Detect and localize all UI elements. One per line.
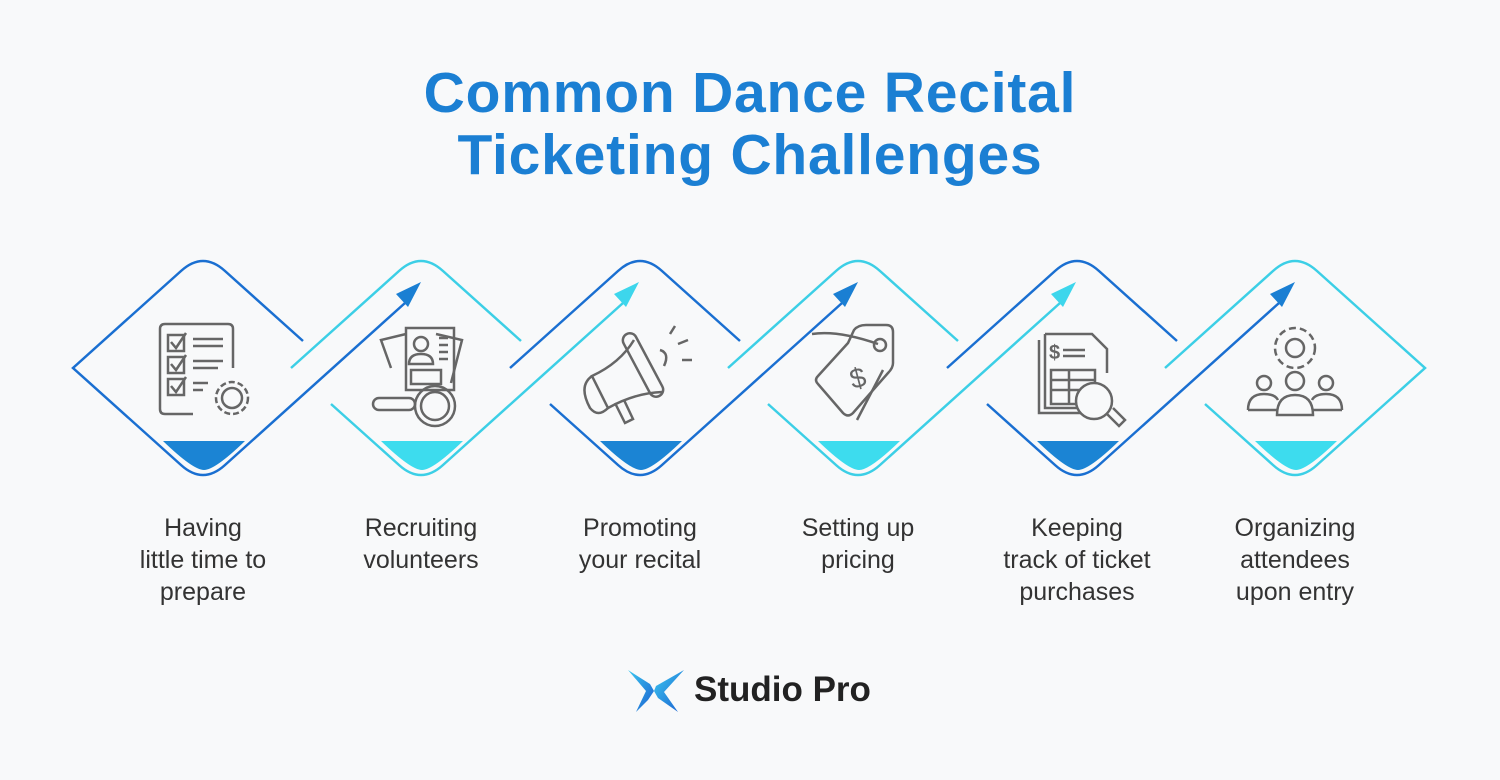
label 1: prepare [160, 578, 246, 606]
icon: price tag: $ [846, 361, 870, 395]
icon: team with gear [1248, 328, 1342, 415]
icon: megaphone [584, 326, 692, 423]
label 6 [1235, 514, 1355, 606]
label 2: volunteers [363, 546, 479, 574]
label 1: little time to [140, 546, 266, 574]
label 3: your recital [579, 546, 701, 574]
label 2 [363, 514, 479, 574]
label 4 [802, 514, 914, 574]
label 6: upon entry [1236, 578, 1354, 606]
icon: resumes with magnifier [373, 328, 462, 426]
label 5 [1003, 514, 1151, 606]
label 2: Recruiting [365, 514, 477, 542]
label 6: Organizing [1235, 514, 1355, 542]
panel 6 diamond [1165, 261, 1425, 475]
label 3: Promoting [583, 514, 697, 542]
label 4: pricing [821, 546, 895, 574]
panel 3 diamond [510, 261, 858, 475]
label 3 [579, 514, 701, 574]
label 1: Having [164, 514, 242, 542]
logo [628, 670, 871, 712]
icon: checklist with gear [160, 324, 248, 414]
icon: logo mark [628, 670, 684, 712]
panel 4 diamond [728, 261, 1076, 475]
icon: report with magnifier: $ [1049, 342, 1060, 364]
title: Common Dance Recital [424, 61, 1076, 125]
title: Ticketing Challenges [457, 123, 1043, 187]
label 4: Setting up [802, 514, 914, 542]
title [424, 61, 1076, 187]
label 1 [140, 514, 266, 606]
panel 2 diamond [291, 261, 639, 475]
icon: price tag [812, 325, 893, 420]
panel 1 diamond [73, 261, 421, 475]
icon: report with magnifier [1039, 334, 1125, 426]
label 6: attendees [1240, 546, 1350, 574]
label 5: purchases [1019, 578, 1135, 606]
logo: Studio Pro [694, 670, 871, 709]
panel 5 diamond [947, 261, 1295, 475]
label 5: track of ticket [1003, 546, 1151, 574]
label 5: Keeping [1031, 514, 1123, 542]
